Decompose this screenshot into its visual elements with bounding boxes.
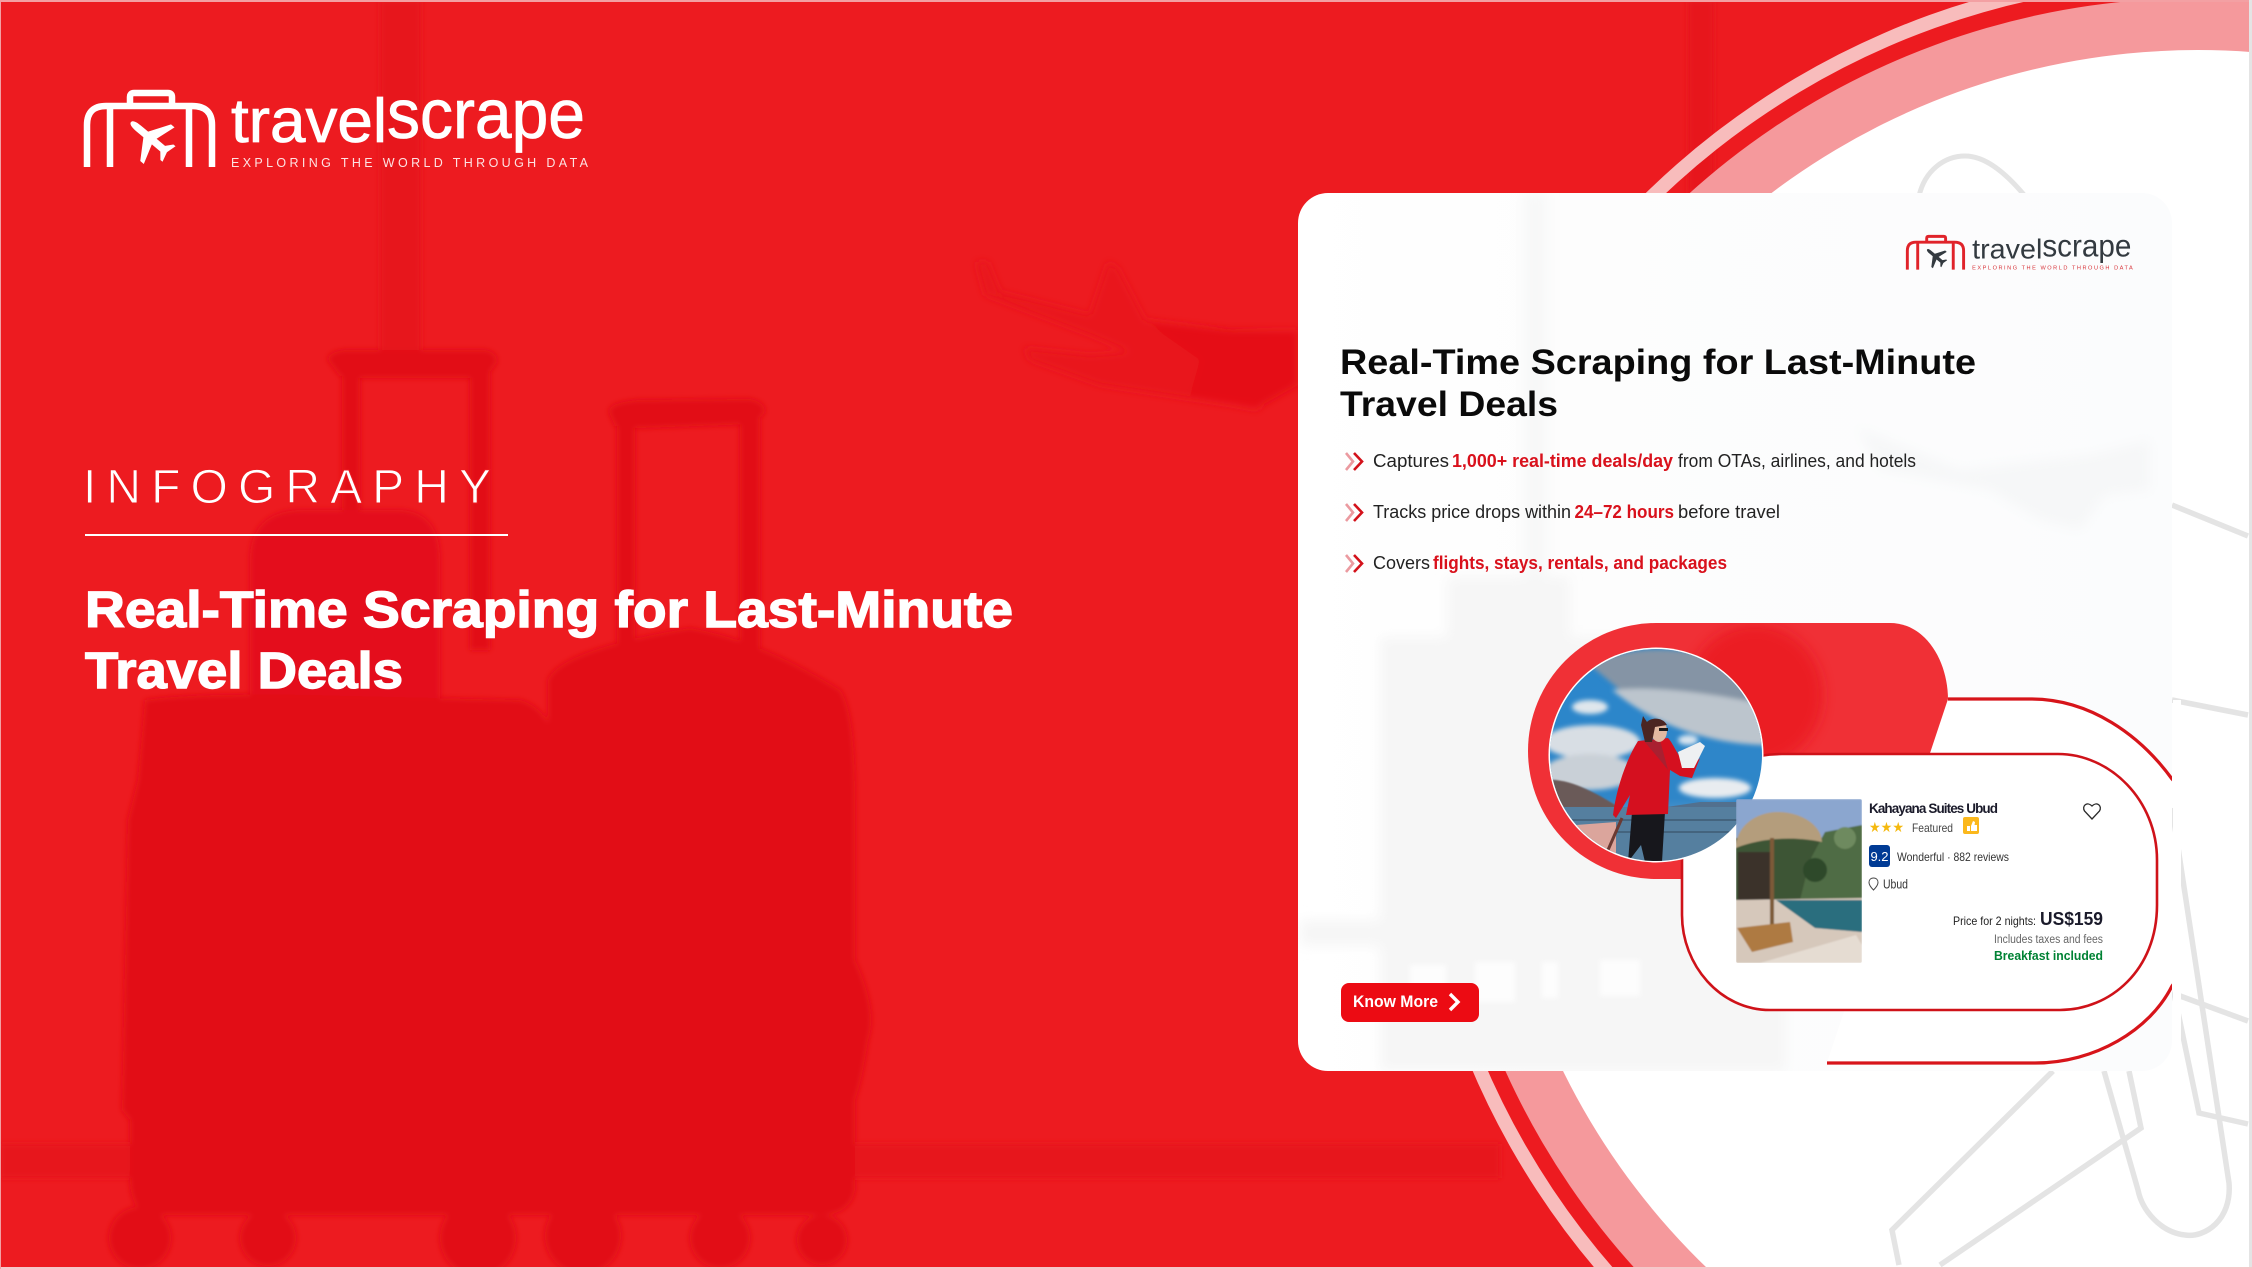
main heading: Travel Deals [85,642,403,699]
location: Ubud [1883,878,1908,892]
bullet 1 [1346,451,1916,471]
photo: hotel pool with parasol [1736,799,1862,963]
button: know more: Know More [1353,993,1438,1011]
outer red outline curve [1827,699,2200,1063]
logo: travelscrape small: scrape [2042,228,2131,264]
card heading [1340,343,1976,424]
star rating: ★★★ [1869,820,1904,836]
button: know more [1341,983,1479,1022]
logo: travelscrape small: travel [1972,233,2042,264]
background photo: suitcases watermark [0,0,1714,1269]
review text: Wonderful · 882 reviews [1897,850,2009,864]
bullet 2: Tracks price drops within [1373,502,1571,522]
logo tagline: EXPLORING THE WORLD THROUGH DATA [231,156,589,170]
logo: travelscrape white [87,75,589,172]
icon: suitcase with plane [87,93,212,172]
divider under label [85,534,508,536]
card heading: Real-Time Scraping for Last-Minute [1340,343,1976,382]
bullet 2: 24–72 hours [1574,502,1674,522]
bullet 1: Captures [1373,451,1449,471]
red pill behind photo [1528,623,1948,879]
card heading: Travel Deals [1340,385,1558,424]
hotel details [1869,801,2103,963]
bullet 2 [1346,502,1780,522]
icon: double chevron [1346,453,1362,470]
ghost photo inside card [1308,645,1425,1062]
featured tag: Featured [1912,821,1953,835]
white mask beyond outline [2173,700,2181,1072]
ghost luggage outline on white area [1892,156,2248,1265]
photo: woman traveller in red coat [1544,647,1768,863]
panel: content card [1298,193,2200,1072]
logo: travelscrape small [1907,228,2133,272]
background photo: airplane silhouette [976,262,1298,410]
price: US$159 [2040,909,2103,929]
logo: travelscrape white: scrape [387,75,585,153]
bullet 3: flights, stays, rentals, and packages [1433,553,1727,573]
icon: map pin [1869,878,1878,890]
bullet 1: from OTAs, airlines, and hotels [1678,451,1916,471]
bullet 3: Covers [1373,553,1430,573]
label: infography: INFOGRAPHY [83,461,491,514]
main heading [85,581,1013,699]
hotel name: Kahayana Suites Ubud [1869,801,1998,816]
icon: heart [2084,804,2100,819]
breakfast note: Breakfast included [1994,949,2103,963]
bullet 2: before travel [1678,502,1780,522]
logo: travelscrape small: EXPLORING THE WORLD THROUGH DATA [1972,266,2133,272]
score badge [1869,845,1890,867]
icon: double chevron [1346,504,1362,521]
icon: thumbs up badge [1963,817,1979,834]
taxes note: Includes taxes and fees [1994,934,2103,946]
main heading: Real-Time Scraping for Last-Minute [85,581,1013,638]
decorative arcs: pale ring, pink ring, white disc [1408,0,2252,1269]
bullet 1: 1,000+ real-time deals/day [1452,451,1673,471]
card background [1298,193,2172,1071]
hotel listing card [1682,754,2157,1010]
price note: Price for 2 nights: [1953,914,2036,928]
score badge: 9.2 [1870,849,1889,864]
icon: double chevron [1346,555,1362,572]
logo wordmark: travel [231,87,387,156]
